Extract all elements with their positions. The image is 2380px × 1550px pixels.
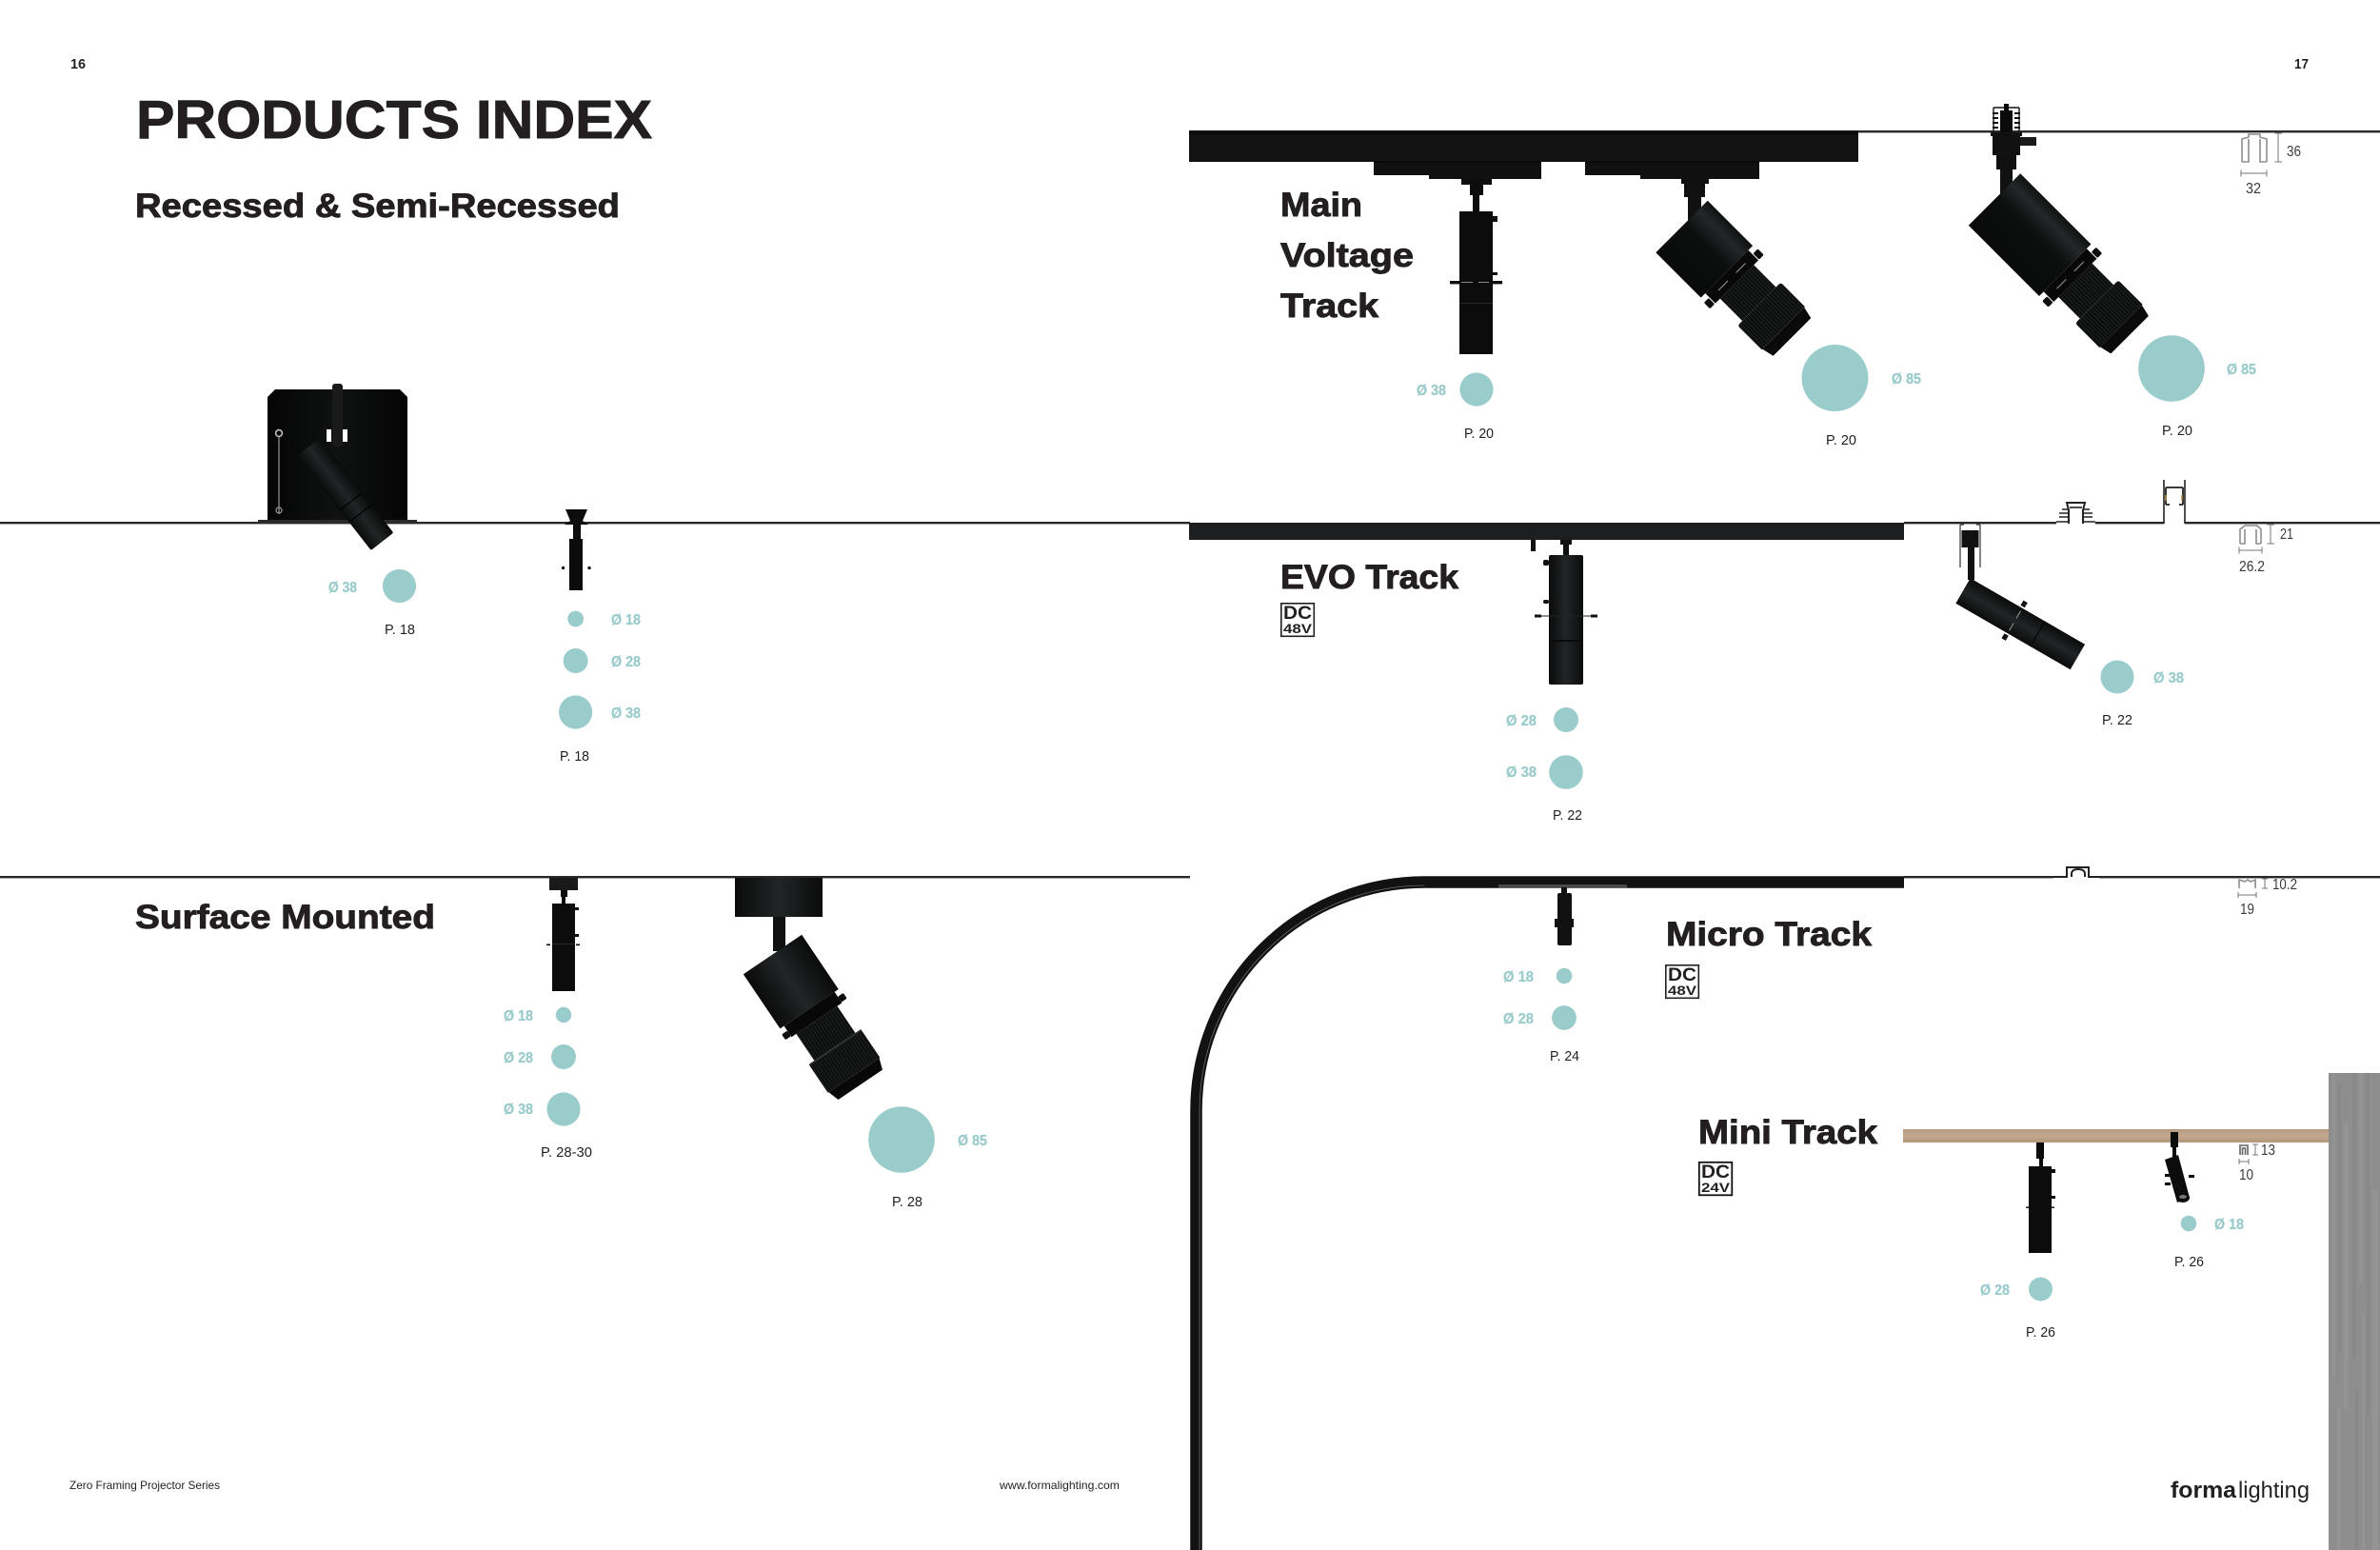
track: wood mini track	[1903, 1129, 2329, 1143]
label: page 18: P. 18	[560, 748, 589, 765]
page number left: 16	[70, 56, 86, 72]
label: diameter 28: Ø 28	[611, 654, 641, 670]
circle: diameter 38	[1459, 372, 1494, 407]
label: diameter 28: Ø 28	[1980, 1282, 2010, 1299]
panel: recessed and semi-recessed	[135, 188, 641, 765]
heading: main voltage track	[1280, 187, 1414, 325]
icon: main track profile with dimensions: 32	[2246, 181, 2261, 197]
icon: mini track profile with dimensions: 10	[2239, 1167, 2253, 1183]
heading: main voltage track: Main	[1280, 187, 1362, 224]
icon: micro track profile with dimensions: 10.2	[2272, 877, 2297, 893]
logo: formalighting	[2171, 1478, 2310, 1503]
panel: surface mounted	[135, 878, 987, 1210]
label: diameter 85: Ø 85	[958, 1133, 987, 1149]
circle: diameter 28	[2029, 1278, 2053, 1301]
footer: series name: Zero Framing Projector Series	[69, 1479, 220, 1492]
heading: mini track: Mini Track	[1698, 1114, 1878, 1151]
track: main voltage	[1189, 130, 1858, 179]
heading: recessed: Recessed & Semi-Recessed	[135, 188, 620, 225]
footer: website: www.formalighting.com	[999, 1479, 1120, 1492]
label: page 22: P. 22	[2102, 712, 2132, 728]
icon: angled EVO lamp in track section	[1952, 525, 2089, 676]
label: page 22: P. 22	[1553, 807, 1582, 824]
icon: straight 38 lamp	[1450, 179, 1502, 354]
icon: EVO track profile with dimensions: 21	[2280, 527, 2293, 543]
icon: semi-recessed lamp	[562, 509, 590, 590]
title: PRODUCTS INDEX	[136, 89, 652, 150]
label: page 20: P. 20	[1826, 432, 1856, 448]
circle: diameter 85	[868, 1106, 935, 1173]
icon: small surface lamp	[546, 878, 580, 991]
badge: DC 24V	[1699, 1162, 1732, 1195]
badge: DC 48V: DC	[1283, 604, 1312, 624]
logo: formalighting: forma	[2171, 1478, 2237, 1503]
badge: DC 48V	[1666, 965, 1698, 998]
label: diameter 18: Ø 18	[2214, 1217, 2244, 1233]
heading: main voltage track: Track	[1280, 288, 1379, 325]
circle: diameter 28	[1554, 707, 1578, 732]
circle: diameter 38	[1549, 755, 1583, 789]
circle: diameter 18	[2181, 1216, 2196, 1231]
icon: recessed flange profile	[2056, 503, 2095, 524]
circle: diameter 18	[556, 1007, 571, 1023]
label: pages 28-30: P. 28-30	[541, 1144, 592, 1161]
ceiling and wall lines	[0, 130, 2380, 878]
circle: diameter 38	[546, 1092, 581, 1126]
icon: EVO track profile with dimensions: 26.2	[2239, 559, 2265, 575]
badge: DC 48V	[1281, 604, 1314, 636]
panel: mini track	[1698, 1073, 2380, 1550]
icon: straight EVO lamp	[1531, 540, 1597, 685]
icon: EVO track profile with dimensions	[2239, 525, 2293, 575]
badge: DC 48V: DC	[1668, 965, 1696, 985]
label: diameter 38: Ø 38	[504, 1102, 533, 1118]
heading: main voltage track: Voltage	[1280, 237, 1414, 274]
label: page 26: P. 26	[2026, 1324, 2055, 1341]
track: curved micro	[1196, 882, 1904, 1550]
label: page 28: P. 28	[892, 1194, 922, 1210]
icon: micro track profile with dimensions: 19	[2240, 902, 2254, 918]
icon: mini track profile with dimensions: 13	[2261, 1143, 2275, 1159]
page number right: 17	[2294, 56, 2309, 72]
label: page 20: P. 20	[2162, 423, 2192, 439]
icon: main track profile with dimensions: 36	[2287, 144, 2301, 160]
icon: straight mini lamp	[2026, 1143, 2055, 1253]
icon: recessed housing with lamp	[258, 384, 417, 550]
icon: trimless recessed profile	[2164, 480, 2185, 524]
icon: micro lamp	[1555, 887, 1574, 945]
label: diameter 38: Ø 38	[1506, 765, 1537, 781]
label: diameter 38: Ø 38	[328, 580, 357, 596]
label: diameter 28: Ø 28	[1503, 1011, 1534, 1027]
heading: micro track: Micro Track	[1666, 916, 1873, 953]
label: diameter 38: Ø 38	[611, 705, 641, 722]
label: diameter 18: Ø 18	[1503, 969, 1534, 985]
icon: micro track profile with dimensions	[2238, 877, 2297, 918]
circle: diameter 38	[559, 695, 592, 729]
badge: DC 48V: 48V	[1668, 983, 1697, 998]
label: diameter 38: Ø 38	[1417, 383, 1446, 399]
circle: diameter 28	[1552, 1005, 1577, 1030]
circle: diameter 38	[2100, 661, 2134, 693]
track: EVO	[1189, 523, 1904, 540]
label: page 20: P. 20	[1464, 426, 1494, 442]
icon: micro recessed profile	[2053, 867, 2099, 877]
circle: diameter 28	[551, 1044, 576, 1069]
label: diameter 85: Ø 85	[2227, 362, 2256, 378]
circle: diameter 18	[567, 611, 584, 626]
wall: grey concrete	[2329, 1073, 2380, 1550]
icon: angled 85 lamp on track	[1655, 178, 1819, 364]
panel: EVO track	[1189, 480, 2293, 824]
panel: main voltage track	[1189, 104, 2301, 448]
badge: DC 48V: 48V	[1283, 621, 1313, 636]
circle: diameter 38	[383, 569, 416, 603]
icon: mini track profile with dimensions	[2239, 1143, 2275, 1183]
label: diameter 18: Ø 18	[504, 1008, 533, 1024]
circle: diameter 85	[2138, 335, 2205, 402]
label: diameter 18: Ø 18	[611, 612, 641, 628]
heading: EVO track: EVO Track	[1280, 559, 1459, 596]
label: diameter 38: Ø 38	[2153, 670, 2184, 686]
icon: large surface lamp	[735, 878, 891, 1105]
icon: track section with angled 85 lamp	[1968, 104, 2156, 362]
label: page 26: P. 26	[2174, 1254, 2204, 1270]
panel: micro track	[1196, 867, 2297, 1550]
logo: formalighting: lighting	[2238, 1478, 2310, 1503]
icon: angled mini lamp	[2165, 1132, 2194, 1202]
label: diameter 85: Ø 85	[1892, 371, 1921, 388]
label: diameter 28: Ø 28	[1506, 713, 1537, 729]
label: page 18: P. 18	[385, 622, 415, 638]
circle: diameter 18	[1557, 968, 1572, 984]
circle: diameter 85	[1801, 345, 1868, 411]
circle: diameter 28	[564, 648, 588, 673]
badge: DC 24V: 24V	[1701, 1180, 1731, 1195]
heading: surface mounted: Surface Mounted	[135, 899, 435, 936]
badge: DC 24V: DC	[1701, 1162, 1730, 1182]
label: diameter 28: Ø 28	[504, 1050, 533, 1066]
icon: main track profile with dimensions	[2241, 133, 2301, 197]
label: page 24: P. 24	[1550, 1048, 1579, 1064]
